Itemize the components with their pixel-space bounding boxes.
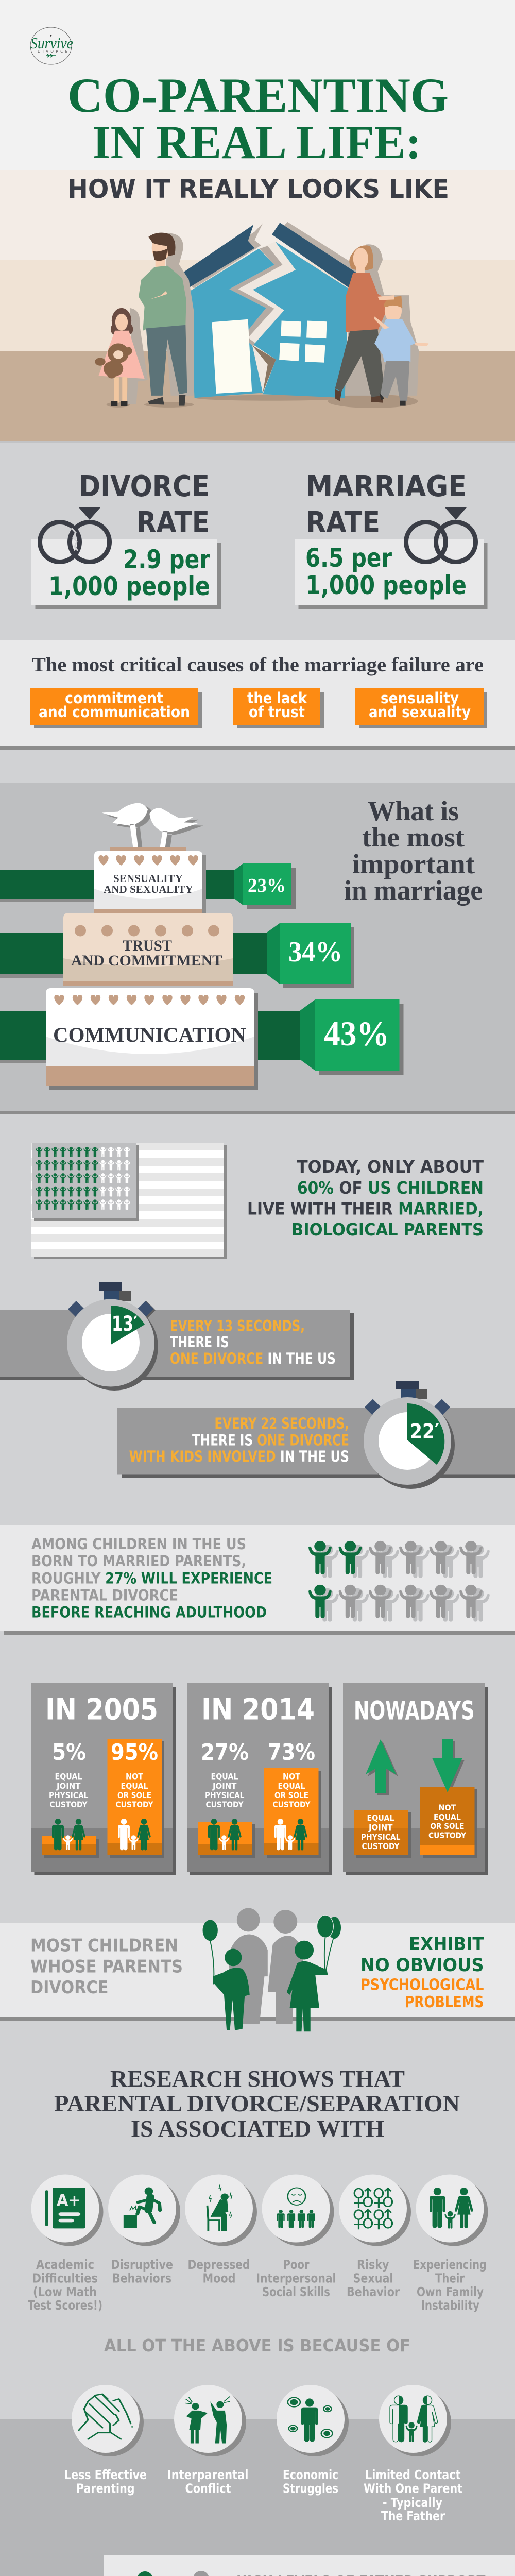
cause labels: The Father (381, 2509, 445, 2523)
outcome labels: Academic (36, 2257, 94, 2272)
panel: in 2005: PHYSICAL (49, 1790, 89, 1800)
arrow: equal custody rising (366, 1739, 398, 1795)
illustration: family with balloons (203, 1908, 341, 2031)
panel: nowadays: OR SOLE (431, 1821, 465, 1831)
panel: every 22 seconds (117, 1381, 515, 1489)
outcome labels: Depressed (187, 2257, 250, 2272)
icon: disruptive child kicking (124, 2187, 160, 2228)
cake middle tier: trust and commitment: TRUST (123, 937, 172, 954)
icon: broken rings (40, 507, 109, 562)
cause: commitment and communication (30, 688, 202, 728)
icon: hands (79, 2394, 132, 2439)
logo: Survive Divorce (30, 27, 73, 64)
panel: in 2005 (31, 1683, 176, 1875)
panel: in 2014: 73% (268, 1739, 315, 1766)
cause: sensuality and sexuality: and sexuality (369, 703, 471, 721)
cause: the lack of trust (233, 688, 324, 728)
icon: man and coins (288, 2397, 332, 2442)
text: today only 60% of US children: TODAY, ONLY ABOUT (297, 1157, 484, 1177)
text: today only 60% of US children: BIOLOGICAL PARENTS (291, 1219, 484, 1240)
text: exhibit no obvious psychological problems (360, 1934, 484, 2011)
icon: family (430, 2188, 473, 2229)
panel: in 2014: 27% (201, 1739, 249, 1766)
panel: nowadays: JOINT (368, 1823, 393, 1832)
panel: every 13 seconds: THERE IS (170, 1333, 229, 1351)
outcome labels: Sexual (353, 2271, 393, 2285)
panel: in 2014: PHYSICAL (205, 1790, 244, 1800)
pictogram: children 3 of 12 (308, 1541, 490, 1622)
cause: commitment and communication: commitment (65, 689, 163, 707)
panel: every 22 seconds: THERE IS ONE DIVORCE (192, 1431, 349, 1449)
bar: 95% not equal custody (107, 1739, 164, 1858)
icon: love birds cake topper (102, 803, 203, 850)
arrow: sole custody falling (420, 1739, 477, 1858)
panel: in 2005: 95% (111, 1739, 158, 1766)
heading: what is the most important in marriage: the most (362, 822, 465, 853)
panel: in 2005: CUSTODY (115, 1800, 153, 1809)
panel: in 2014: EQUAL (211, 1771, 238, 1782)
panel: nowadays: EQUAL (367, 1813, 394, 1823)
girl (95, 308, 148, 406)
heading: research shows: IS ASSOCIATED WITH (131, 2115, 384, 2142)
outcome labels: Risky (357, 2257, 389, 2272)
cause: the lack of trust: of trust (249, 703, 305, 721)
heading: what is the most important in marriage: in marriage (344, 875, 483, 906)
flag: 43% (300, 999, 404, 1075)
text: exhibit no obvious psychological problems: PSYCHOLOGICAL (360, 1976, 484, 1994)
text: exhibit no obvious psychological problems: PROBLEMS (405, 1993, 484, 2011)
bar: 27% equal custody (198, 1822, 255, 1858)
cause labels: Limited Contact (365, 2467, 461, 2482)
cause labels: With One Parent (364, 2481, 462, 2496)
text: 27% parental divorce: AMONG CHILDREN IN THE US (31, 1535, 246, 1553)
outcome labels: Own Family (417, 2284, 484, 2299)
bar: 5% equal custody (42, 1836, 99, 1858)
subtitle: HOW IT REALLY LOOKS LIKE (67, 174, 449, 204)
outcome labels: Their (435, 2271, 465, 2285)
heading: what is the most important in marriage: What is (368, 795, 459, 826)
outcome labels: Experiencing (413, 2257, 487, 2272)
cause labels: Conflict (185, 2481, 231, 2496)
panel: in 2005: NOT (126, 1771, 143, 1782)
icon: wedding rings (406, 507, 476, 562)
icons: family, equal custody (208, 1819, 242, 1851)
text: most children whose parents divorce: DIVORCE (30, 1977, 108, 1998)
text: most children whose parents divorce: WHOSE PARENTS (30, 1957, 183, 1977)
cause: sensuality and sexuality (355, 688, 487, 728)
cake top tier: sensuality and sexuality: SENSUALITY (113, 872, 183, 885)
cause labels: Less Effective (64, 2467, 147, 2482)
outcome labels: Disruptive (111, 2257, 173, 2272)
text: 27% parental divorce: ROUGHLY 27% WILL EXPERIENCE (31, 1569, 272, 1587)
logo: Survive Divorce: DIVORCE (38, 49, 67, 54)
icon: family with green father (129, 2571, 219, 2576)
outcome labels: Poor (283, 2257, 310, 2272)
panel: divorce rate: 1,000 people (48, 571, 210, 601)
panel: in 2005: EQUAL (55, 1771, 82, 1782)
flag: 23% (234, 863, 296, 909)
heading: research shows: RESEARCH SHOWS THAT (110, 2065, 405, 2092)
panel: nowadays: PHYSICAL (361, 1832, 401, 1842)
heading: what is the most important in marriage (344, 795, 483, 906)
panel: marriage rate: MARRIAGE (306, 470, 467, 503)
text: 27% parental divorce: BORN TO MARRIED PARENTS, (31, 1552, 246, 1570)
panel: in 2014: EQUAL (278, 1781, 305, 1791)
cause: commitment and communication: and communication (39, 703, 190, 721)
panel: in 2014: OR SOLE (274, 1790, 308, 1800)
outcome labels: Behavior (347, 2284, 400, 2299)
panel: divorce rate: DIVORCE (79, 470, 210, 503)
panel: in 2005: EQUAL (121, 1781, 148, 1791)
title (67, 68, 449, 168)
circles row: associated outcomes (28, 2174, 488, 2313)
panel: every 22 seconds: WITH KIDS INVOLVED IN THE US (129, 1448, 349, 1465)
cake bottom tier: communication (46, 988, 258, 1090)
text: 27% parental divorce: BEFORE REACHING ADULTHOOD (31, 1603, 267, 1621)
logo: Survive Divorce: Survive (30, 34, 73, 52)
panel: in 2014: CUSTODY (273, 1800, 311, 1809)
panel: in 2014: IN 2014 (201, 1693, 315, 1727)
text: most children whose parents divorce: MOST CHILDREN (30, 1935, 178, 1956)
cause labels: Interparental (167, 2467, 248, 2482)
panel: marriage rate: 6.5 per (305, 543, 392, 573)
panel: in 2005: 5% (52, 1739, 86, 1766)
icon: US flag made of families (31, 1143, 227, 1259)
cake bottom tier: communication: COMMUNICATION (53, 1023, 246, 1046)
card: father support (104, 2555, 515, 2576)
panel: nowadays: NOT (439, 1803, 456, 1812)
icon: arguing couple (185, 2397, 230, 2443)
panel: marriage rate (295, 470, 487, 609)
panel: in 2014: JOINT (212, 1781, 237, 1791)
panel: every 13 seconds (0, 1282, 354, 1391)
panel: divorce rate: RATE (136, 506, 210, 539)
panel: in 2005: OR SOLE (117, 1790, 151, 1800)
icon: stopwatch 13 (67, 1282, 158, 1391)
outcome labels: Instability (421, 2298, 479, 2313)
panel: marriage rate: RATE (306, 506, 380, 539)
cause labels: Economic (283, 2467, 338, 2482)
flag: 43%: 43% (324, 1014, 389, 1053)
flag: 23%: 23% (248, 875, 286, 896)
icon: depressed person on chair (207, 2184, 232, 2231)
cake top tier: sensuality and sexuality: AND SEXUALITY (104, 883, 193, 895)
outcome labels: Behaviors (112, 2271, 171, 2285)
cause labels (64, 2467, 462, 2523)
title: IN REAL LIFE: (92, 116, 421, 168)
panel: divorce rate: 2.9 per (123, 545, 210, 574)
panel: nowadays: EQUAL (434, 1812, 461, 1822)
outcome labels: (Low Math (33, 2284, 97, 2299)
cause labels: - Typically (383, 2495, 442, 2510)
title: CO-PARENTING (67, 68, 449, 123)
icon: report card A+ (45, 2188, 85, 2228)
text: 27% parental divorce (31, 1535, 272, 1621)
flag: 34% (267, 923, 354, 988)
heading: all of the above: ALL OT THE ABOVE IS BECAUSE OF (104, 2335, 410, 2355)
panel: in 2014 (187, 1683, 332, 1875)
text: today only 60% of US children (247, 1157, 484, 1240)
panel: every 13 seconds: EVERY 13 SECONDS, (170, 1317, 305, 1334)
panel: every 13 seconds: ONE DIVORCE IN THE US (170, 1350, 336, 1367)
panel: marriage rate: 1,000 people (305, 570, 467, 600)
hero section background (0, 0, 515, 442)
text: today only 60% of US children: 60% OF US CHILDREN (297, 1178, 484, 1198)
cause labels: Struggles (283, 2481, 338, 2496)
flag: 34%: 34% (288, 936, 342, 968)
bar: equal custody (354, 1810, 411, 1858)
heading: causes of marriage failure: The most critical causes of the marriage failure are (32, 654, 484, 676)
icon: stopwatch 22: 22′ (410, 1420, 439, 1444)
panel: nowadays: CUSTODY (428, 1831, 466, 1840)
panel: nowadays (343, 1683, 488, 1875)
cake top tier: sensuality and sexuality (94, 847, 206, 913)
panel: in 2005: JOINT (56, 1781, 81, 1791)
cake middle tier: trust and commitment: AND COMMITMENT (71, 952, 222, 969)
cause labels: Parenting (76, 2481, 135, 2496)
icon: half-filled family (390, 2396, 438, 2442)
outcome labels: Mood (203, 2271, 236, 2285)
father (139, 233, 194, 406)
outcome labels: Social Skills (262, 2284, 330, 2299)
panel: in 2005: IN 2005 (45, 1693, 158, 1727)
panel: in 2005: CUSTODY (49, 1800, 88, 1809)
text: exhibit no obvious psychological problems: NO OBVIOUS (360, 1955, 484, 1976)
heading: what is the most important in marriage: important (352, 849, 475, 879)
outcome labels (28, 2257, 487, 2313)
outcome labels: Test Scores!) (28, 2298, 102, 2313)
divider line (0, 441, 515, 443)
heading: research shows (54, 2065, 460, 2142)
icon: report card A+: A+ (57, 2192, 80, 2210)
panel: in 2014: CUSTODY (206, 1800, 244, 1809)
icons: family, equal custody (52, 1819, 85, 1851)
outcome labels: Interpersonal (256, 2271, 336, 2285)
cause: sensuality and sexuality: sensuality (381, 689, 459, 707)
panel: nowadays: CUSTODY (362, 1841, 400, 1851)
bar: 73% not equal custody (264, 1768, 321, 1858)
panel: in 2014: NOT (283, 1771, 300, 1782)
panel: divorce rate (31, 470, 221, 609)
icon: stopwatch 13: 13′ (112, 1312, 138, 1336)
icon: stopwatch 22 (364, 1381, 455, 1489)
icon: sad face and small crowd (277, 2188, 315, 2228)
illustration: family and broken house (95, 222, 428, 408)
circles row: causes (64, 2385, 462, 2523)
icons: family, sole custody (118, 1819, 151, 1851)
cake middle tier: trust and commitment (63, 913, 233, 986)
cause: the lack of trust: the lack (247, 689, 307, 707)
panel: every 22 seconds: EVERY 22 SECONDS, (214, 1415, 349, 1432)
text: today only 60% of US children: LIVE WITH THEIR MARRIED, (247, 1198, 484, 1219)
outcome labels: Difficulties (32, 2271, 98, 2285)
text: most children whose parents divorce (30, 1935, 183, 1998)
text: 27% parental divorce: PARENTAL DIVORCE (31, 1587, 178, 1604)
mother and boy (335, 244, 428, 406)
heading: research shows: PARENTAL DIVORCE/SEPARATION (54, 2090, 460, 2116)
text: exhibit no obvious psychological problems: EXHIBIT (409, 1934, 484, 1955)
ribbons behind cake (0, 870, 302, 1063)
icons: family, sole custody (274, 1819, 307, 1851)
icon: gender symbols (354, 2188, 392, 2229)
